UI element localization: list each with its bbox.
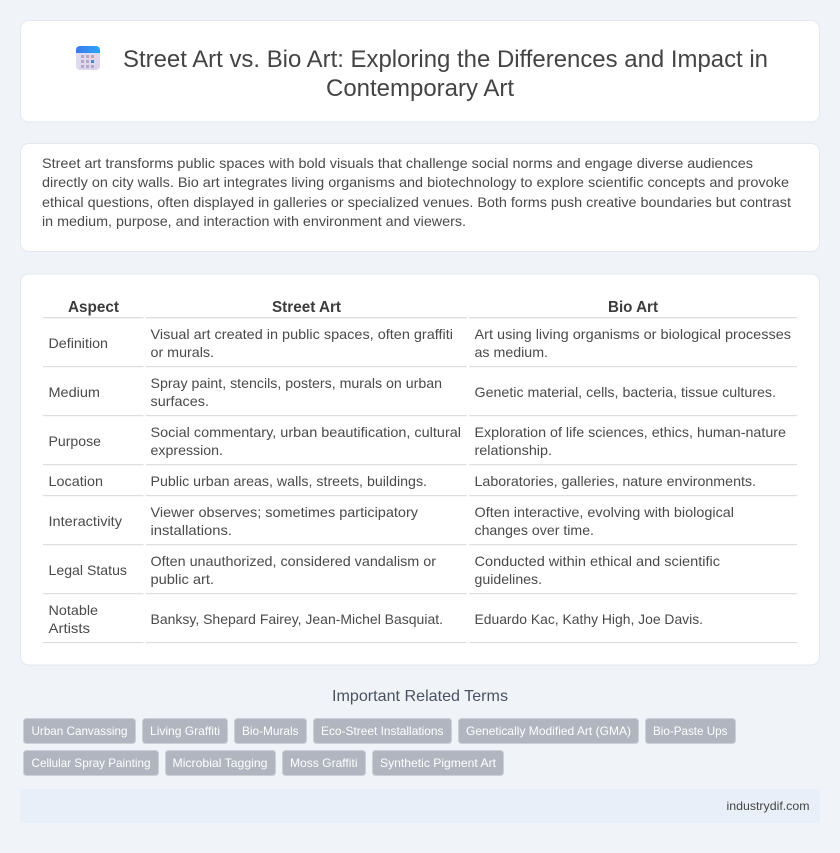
tag: Bio-Murals: Bio-Murals xyxy=(242,724,298,738)
table row: Legal Status: public art. xyxy=(150,571,214,587)
table row: Definition: as medium. xyxy=(474,344,548,360)
table row: Interactivity xyxy=(43,504,797,545)
tag: Genetically Modified Art (GMA): Genetically Modified Art (GMA) xyxy=(466,724,631,738)
footer xyxy=(20,789,820,823)
table row: Location: Location xyxy=(48,473,103,489)
table row: Purpose: Exploration of life sciences, ethics, human-nature xyxy=(474,424,786,440)
table row: Medium: Genetic material, cells, bacteria, tissue cultures. xyxy=(474,384,776,400)
title: Contemporary Art xyxy=(326,75,514,102)
table row: Interactivity: changes over time. xyxy=(474,522,594,538)
tag: Eco-Street Installations xyxy=(314,718,452,744)
table row: Purpose: Social commentary, urban beautification, cultural xyxy=(150,424,461,440)
table row: Medium: Medium xyxy=(48,384,100,400)
table row: Definition: or murals. xyxy=(150,344,214,360)
tag: Eco-Street Installations: Eco-Street Installations xyxy=(321,724,444,738)
text block: introduction xyxy=(42,155,791,229)
table row: Definition: Definition xyxy=(48,335,108,351)
text block: introduction: directly on city walls. Bio art integrates living organisms and biotechnology to explore scientific concepts and provoke xyxy=(42,174,789,190)
tag: Moss Graffiti: Moss Graffiti xyxy=(290,756,358,770)
tag: Microbial Tagging xyxy=(166,750,276,776)
tag: Synthetic Pigment Art xyxy=(372,750,504,776)
table row: Legal Status: Legal Status xyxy=(48,562,127,578)
panel: introduction xyxy=(20,144,820,252)
table row: Notable Artists xyxy=(43,602,797,643)
table row: Purpose: Purpose xyxy=(48,433,101,449)
panel: header xyxy=(20,20,820,122)
table row: Location: Laboratories, galleries, nature environments. xyxy=(474,473,756,489)
table row: Notable Artists: Banksy, Shepard Fairey, Jean-Michel Basquiat. xyxy=(150,611,443,627)
table header row: Bio Art xyxy=(608,299,659,316)
table row: Legal Status: Conducted within ethical and scientific xyxy=(474,553,720,569)
table row: Purpose xyxy=(43,424,797,465)
tag list: related terms xyxy=(24,718,736,776)
tag: Cellular Spray Painting xyxy=(24,750,158,776)
title xyxy=(123,46,768,102)
table header row xyxy=(43,299,797,318)
table row: Interactivity: Interactivity xyxy=(48,513,122,529)
tag: Urban Canvassing: Urban Canvassing xyxy=(32,724,128,738)
table row: Legal Status: Often unauthorized, considered vandalism or xyxy=(150,553,436,569)
title: Street Art vs. Bio Art: Exploring the Differences and Impact in xyxy=(123,46,768,73)
table row: Medium: surfaces. xyxy=(150,393,209,409)
tag: Synthetic Pigment Art: Synthetic Pigment Art xyxy=(380,756,497,770)
text block: introduction: Street art transforms public spaces with bold visuals that challenge social norms and engage diverse audiences xyxy=(42,155,753,171)
icon: calendar xyxy=(76,46,100,70)
table row: Purpose: expression. xyxy=(150,442,223,458)
footer text: site name: industrydif.com xyxy=(726,799,810,813)
heading: important related terms: Important Related Terms xyxy=(332,688,508,705)
table row: Notable Artists: Artists xyxy=(48,620,90,636)
panel: comparison table xyxy=(20,274,820,665)
table row: Notable Artists: Eduardo Kac, Kathy High, Joe Davis. xyxy=(474,611,703,627)
tag: Moss Graffiti xyxy=(282,750,366,776)
table row: Location: Public urban areas, walls, streets, buildings. xyxy=(150,473,427,489)
table header row: Street Art xyxy=(272,299,342,316)
table row: Interactivity: installations. xyxy=(150,522,232,538)
table row: Purpose: relationship. xyxy=(474,442,552,458)
text block: introduction: ethical questions, often displayed in galleries or specialized venues. Both forms push creative boundaries but contrast xyxy=(42,194,791,210)
tag: Urban Canvassing xyxy=(24,718,136,744)
text block: introduction: in medium, purpose, and interaction with environment and viewers. xyxy=(42,213,466,229)
table row: Notable Artists: Notable xyxy=(48,602,98,618)
tag: Bio-Paste Ups xyxy=(646,718,736,744)
tag: Living Graffiti: Living Graffiti xyxy=(150,724,220,738)
tag: Bio-Paste Ups: Bio-Paste Ups xyxy=(653,724,728,738)
table row: Definition: Visual art created in public spaces, often graffiti xyxy=(150,326,453,342)
tag: Cellular Spray Painting: Cellular Spray Painting xyxy=(32,756,150,770)
table row: Location xyxy=(43,473,797,496)
table row: Interactivity: Viewer observes; sometimes participatory xyxy=(150,504,418,520)
table row: Legal Status xyxy=(43,553,797,594)
table row: Medium xyxy=(43,375,797,416)
table header row: Aspect xyxy=(68,299,120,316)
table row: Definition: Art using living organisms or biological processes xyxy=(474,326,791,342)
tag: Living Graffiti xyxy=(142,718,228,744)
table row: Legal Status: guidelines. xyxy=(474,571,542,587)
tag: Microbial Tagging: Microbial Tagging xyxy=(172,756,268,770)
table row: Medium: Spray paint, stencils, posters, murals on urban xyxy=(150,375,442,391)
tag: Genetically Modified Art (GMA) xyxy=(458,718,638,744)
table row: Interactivity: Often interactive, evolving with biological xyxy=(474,504,734,520)
tag: Bio-Murals xyxy=(234,718,306,744)
table row: Definition xyxy=(43,326,797,367)
